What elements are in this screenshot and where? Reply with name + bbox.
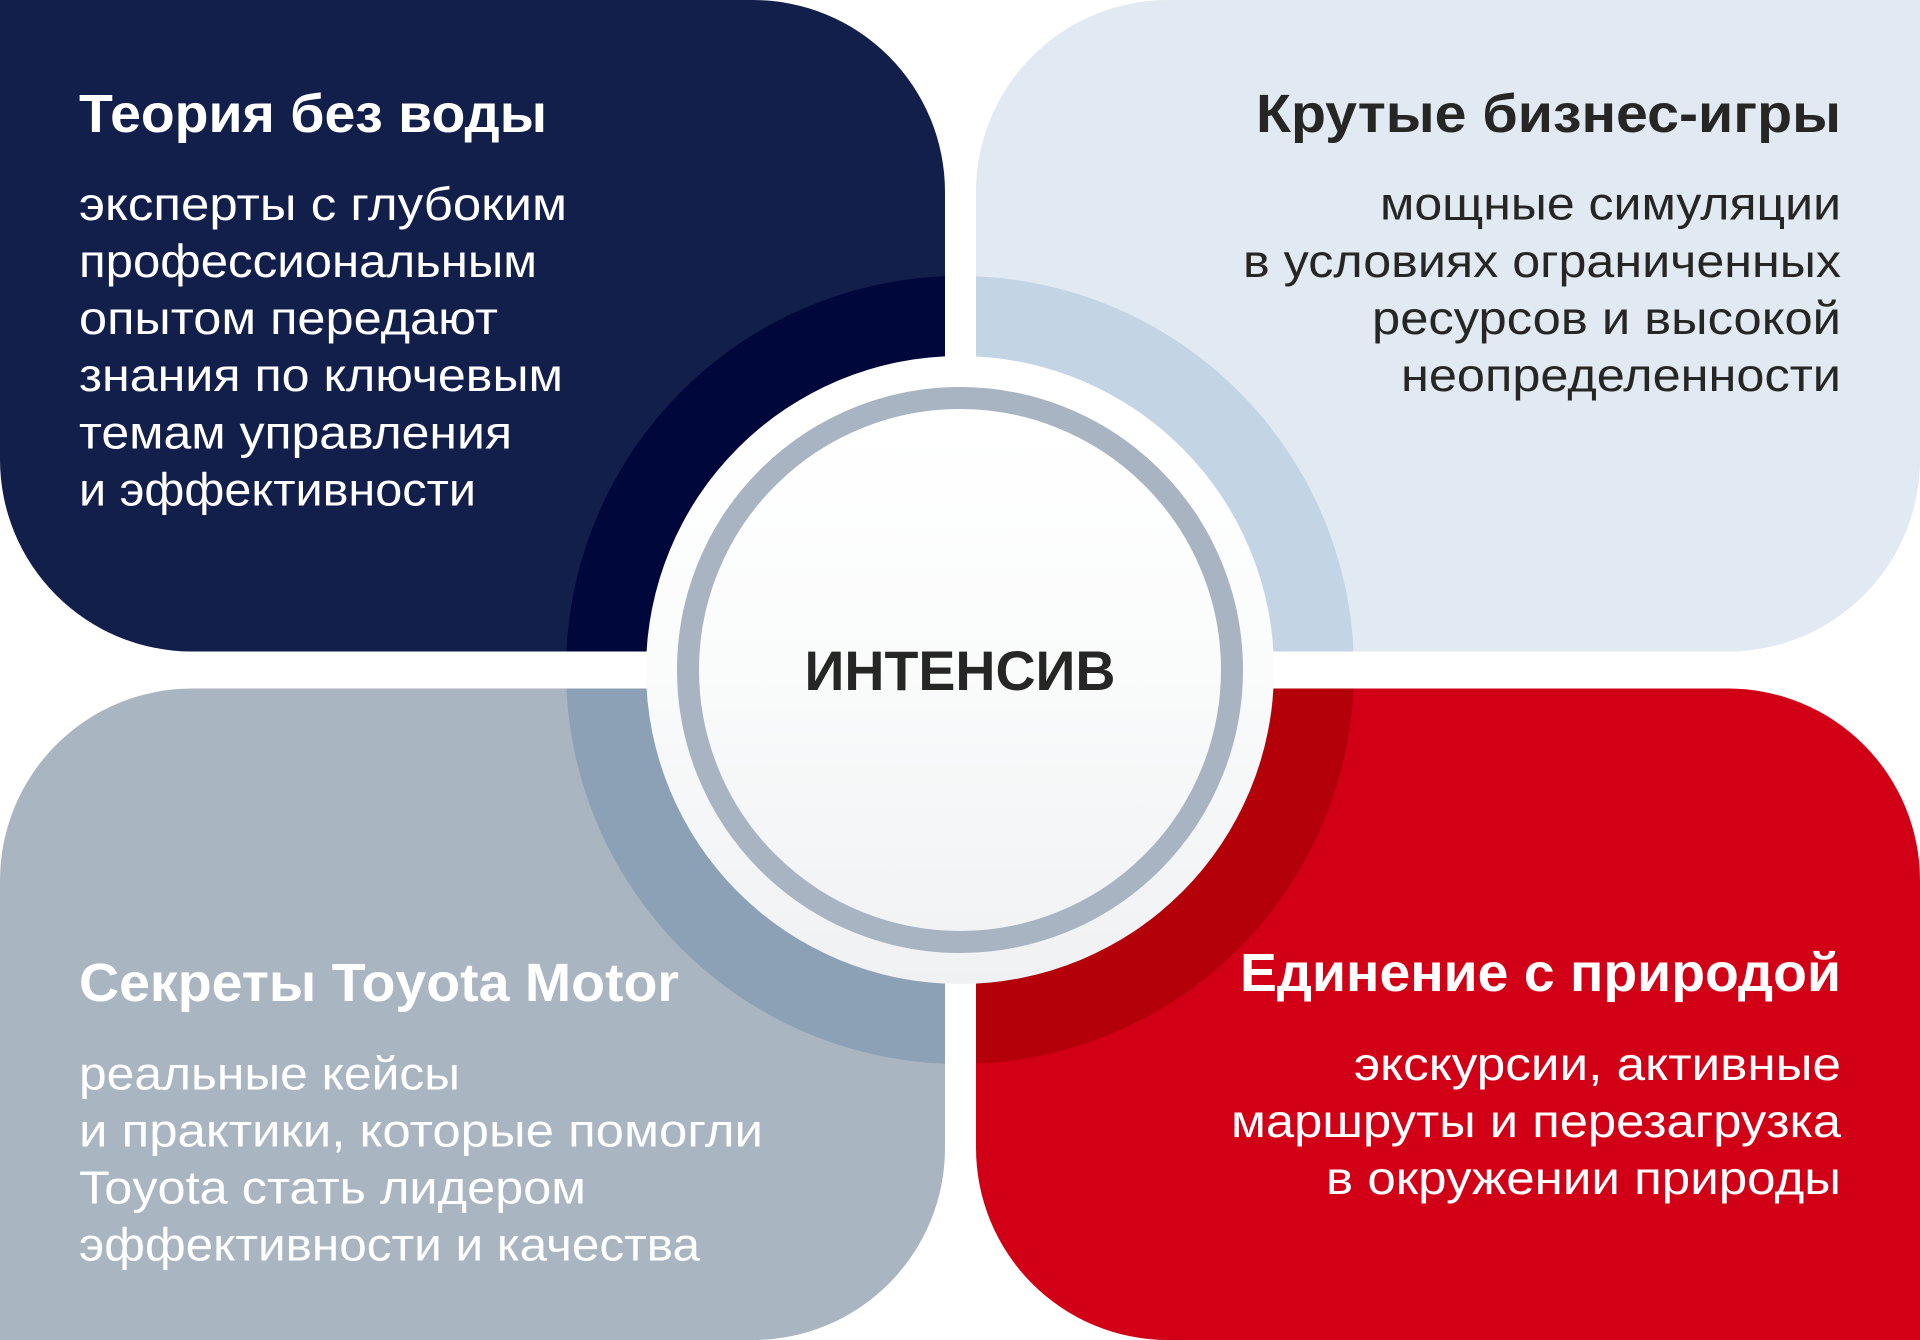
text block: description: и эффективности	[79, 464, 476, 516]
text block: description: опытом передают	[79, 292, 498, 344]
panel: Крутые бизнес-игры	[976, 0, 1920, 652]
panel: Единение с природой	[976, 688, 1920, 1340]
text block: description	[79, 178, 567, 516]
heading: Секреты Toyota Motor: Секреты Toyota Motor	[79, 953, 679, 1013]
text block: description: эффективности и качества	[79, 1218, 700, 1270]
arc: dark red quadrant	[976, 688, 1354, 1064]
text block: description: реальные кейсы	[79, 1048, 460, 1100]
text block: description: и практики, которые помогли	[79, 1104, 763, 1156]
text block: description: профессиональным	[79, 235, 537, 287]
panel background: pale blue	[976, 0, 1920, 652]
arc: light blue quadrant	[976, 276, 1354, 652]
arc: dark navy quadrant	[566, 276, 945, 652]
text block: description: эксперты с глубоким	[79, 178, 567, 230]
panel: Теория без воды	[0, 0, 945, 652]
text block: description: Toyota стать лидером	[79, 1162, 586, 1214]
text block: description: неопределенности	[1401, 349, 1841, 401]
text block: description: мощные симуляции	[1380, 178, 1841, 230]
panel: Секреты Toyota Motor	[0, 688, 945, 1340]
center label: ИНТЕНСИВ	[804, 639, 1116, 702]
panel background: navy	[0, 0, 945, 652]
text block: description: ресурсов и высокой	[1372, 292, 1841, 344]
text block: description: в окружении природы	[1326, 1152, 1841, 1204]
heading: Единение с природой: Единение с природой	[1240, 943, 1841, 1003]
text block: description: в условиях ограниченных	[1243, 235, 1841, 287]
heading: Теория без воды: Теория без воды	[79, 84, 547, 144]
heading: Крутые бизнес-игры: Крутые бизнес-игры	[1256, 84, 1841, 144]
arc: steel blue quadrant	[566, 688, 945, 1064]
panel background: red	[976, 688, 1920, 1340]
text block: description	[1231, 1038, 1841, 1204]
center circle: ИНТЕНСИВ	[646, 356, 1274, 984]
text block: description: маршруты и перезагрузка	[1231, 1095, 1841, 1147]
text block: description: темам управления	[79, 406, 512, 458]
ring	[688, 398, 1232, 942]
text block: description: знания по ключевым	[79, 349, 563, 401]
panel background: grey	[0, 688, 945, 1340]
outer disc	[646, 356, 1274, 984]
text block: description	[1243, 178, 1841, 401]
text block: description	[79, 1048, 763, 1270]
text block: description: экскурсии, активные	[1354, 1038, 1841, 1090]
